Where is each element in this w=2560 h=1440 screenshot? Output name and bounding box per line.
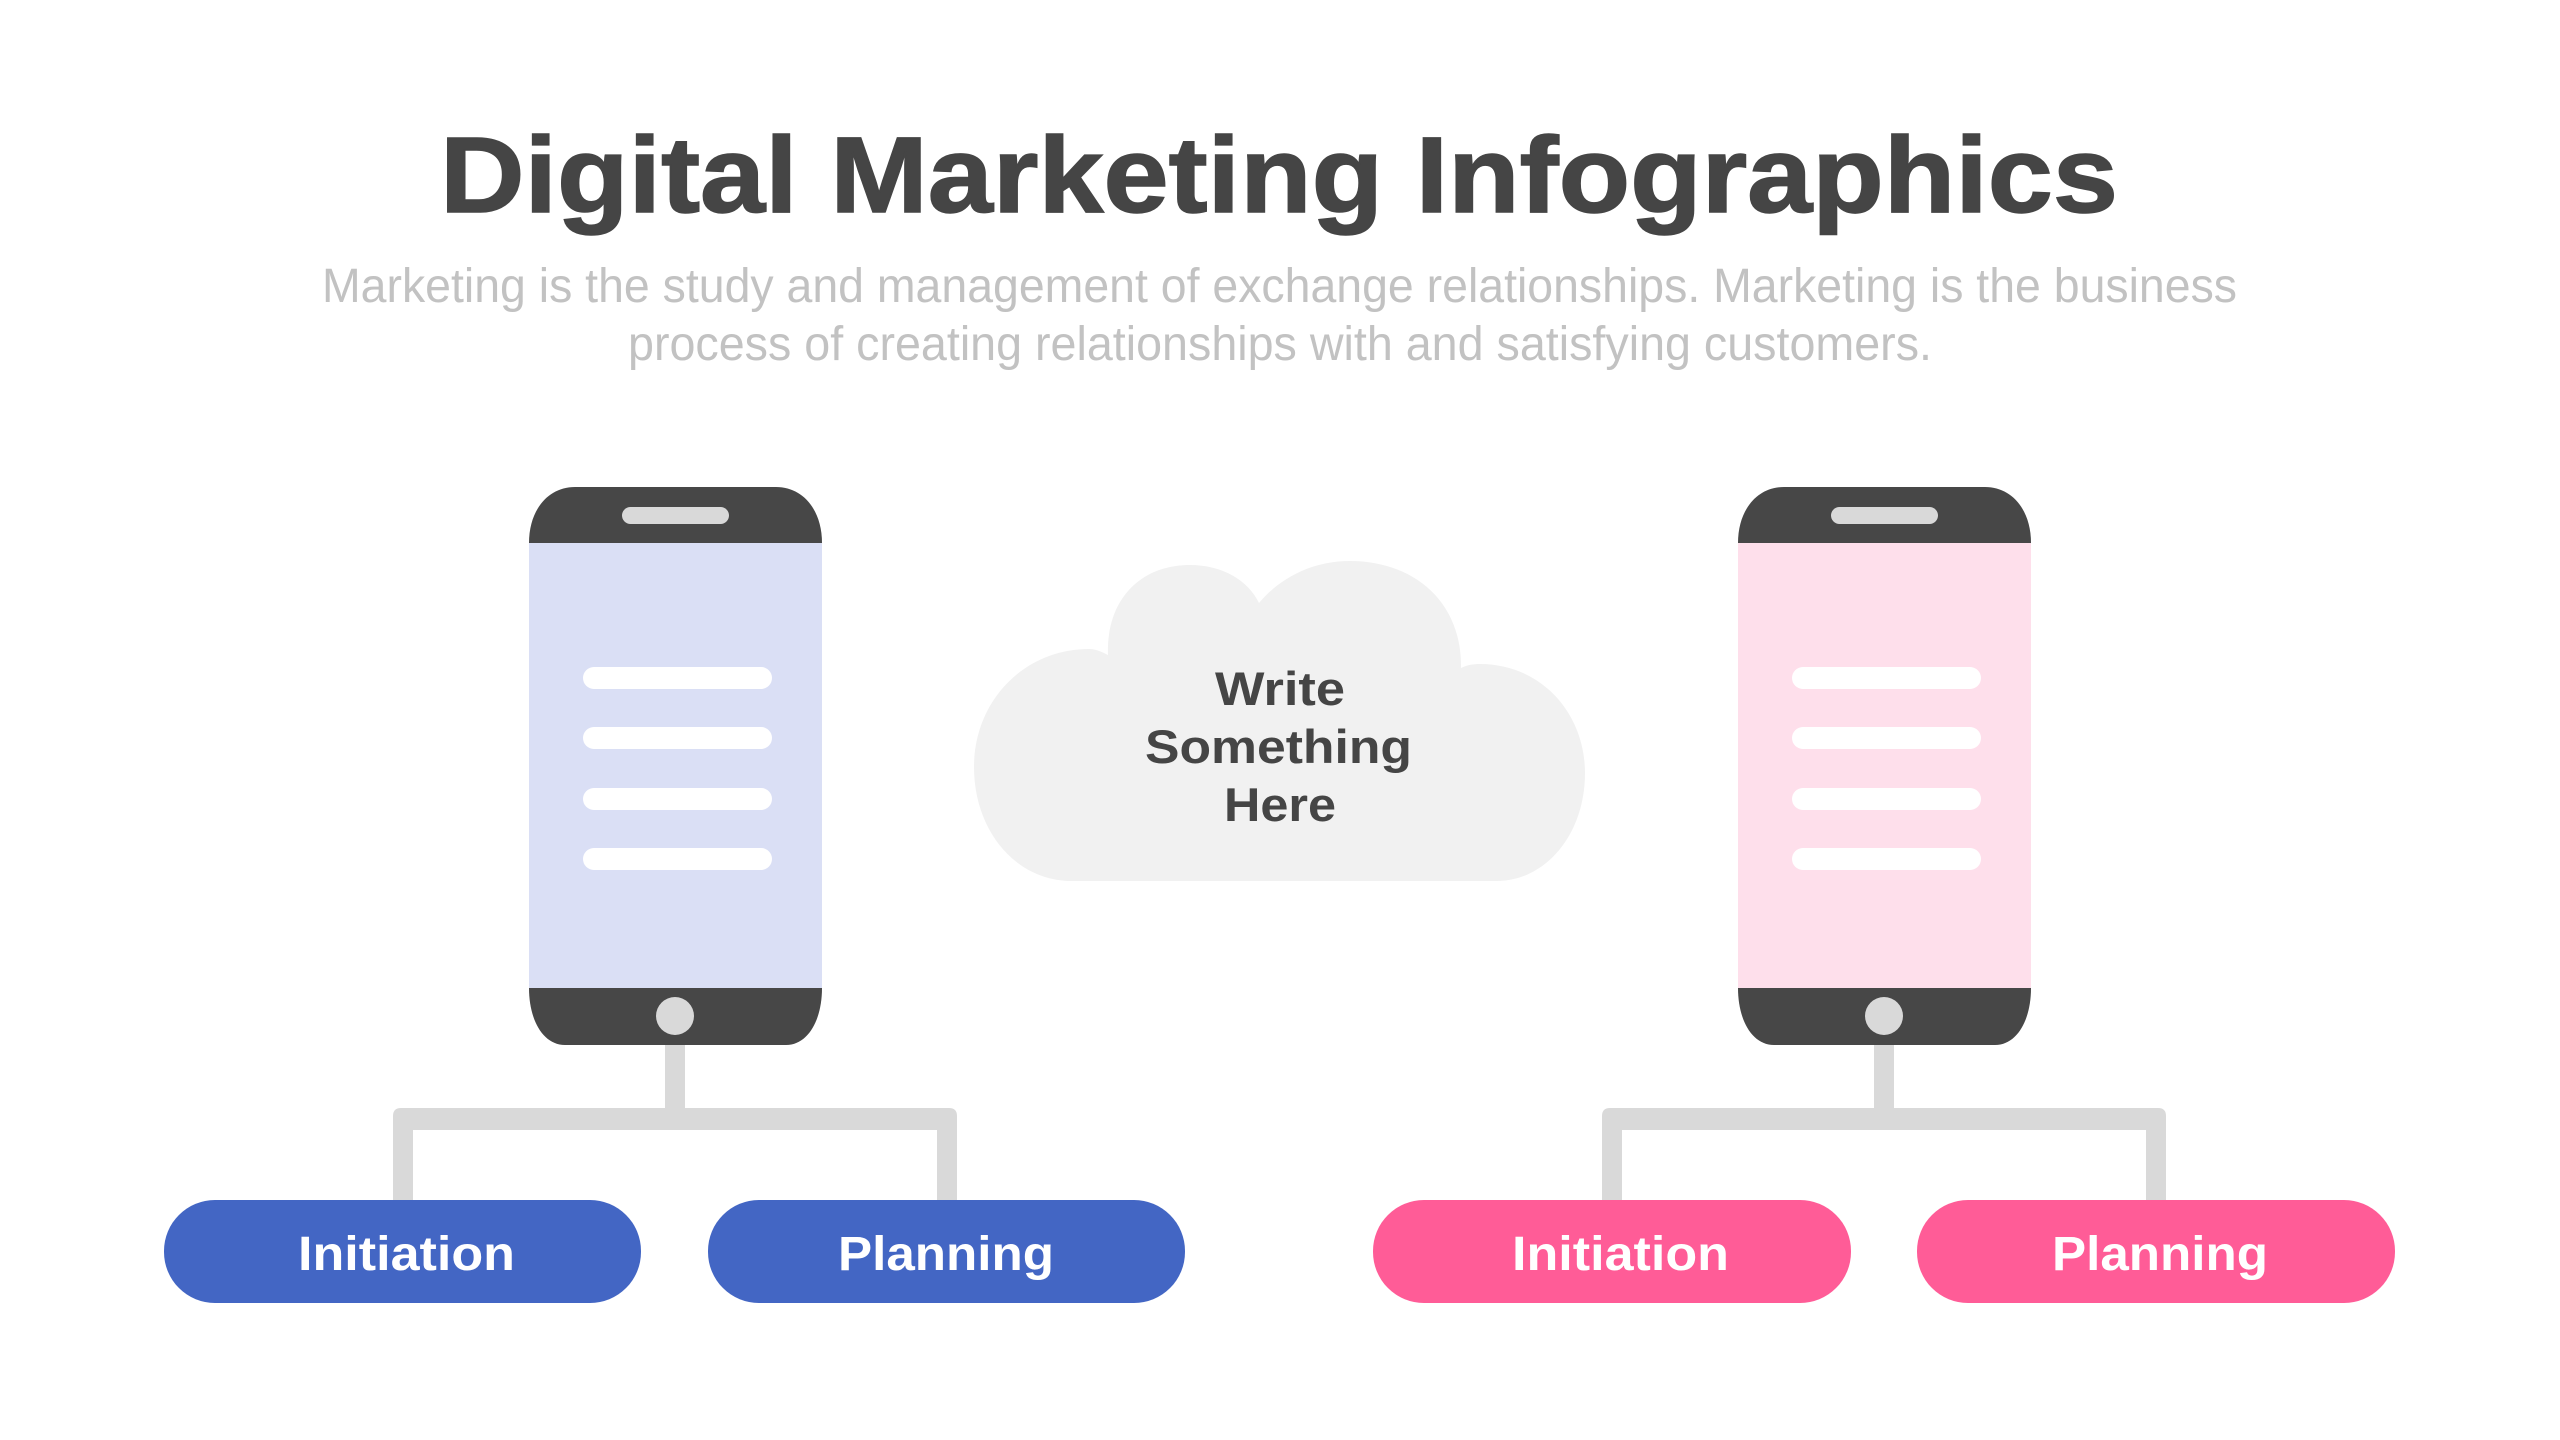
icon: left phone bbox=[529, 487, 822, 1045]
connector: left tree bbox=[393, 1045, 957, 1200]
callout: cloud bbox=[974, 561, 1585, 881]
pill: right Initiation bbox=[1373, 1200, 1851, 1303]
callout: cloud: Here bbox=[1224, 778, 1336, 831]
panel: right phone with connector and pills bbox=[1373, 487, 2395, 1303]
subtitle text block bbox=[322, 260, 2237, 371]
pill: right Planning bbox=[1917, 1200, 2395, 1303]
pill: right Initiation: Initiation bbox=[1512, 1228, 1729, 1281]
subtitle text block: process of creating relationships with and satisfying customers. bbox=[628, 318, 1932, 371]
icon: right phone bbox=[1738, 487, 2031, 1045]
connector: right tree bbox=[1602, 1045, 2166, 1200]
pill: left Planning: Planning bbox=[838, 1228, 1054, 1281]
title: Digital Marketing Infographics bbox=[440, 114, 2118, 235]
callout: cloud: Something bbox=[1145, 720, 1412, 773]
callout: cloud: Write bbox=[1215, 662, 1345, 715]
pill: left Initiation bbox=[164, 1200, 641, 1303]
panel: left phone with connector and pills bbox=[164, 487, 1185, 1303]
pill: left Planning bbox=[708, 1200, 1185, 1303]
subtitle text block: Marketing is the study and management of exchange relationships. Marketing is the business bbox=[322, 260, 2237, 313]
pill: left Initiation: Initiation bbox=[298, 1228, 515, 1281]
pill: right Planning: Planning bbox=[2052, 1228, 2268, 1281]
